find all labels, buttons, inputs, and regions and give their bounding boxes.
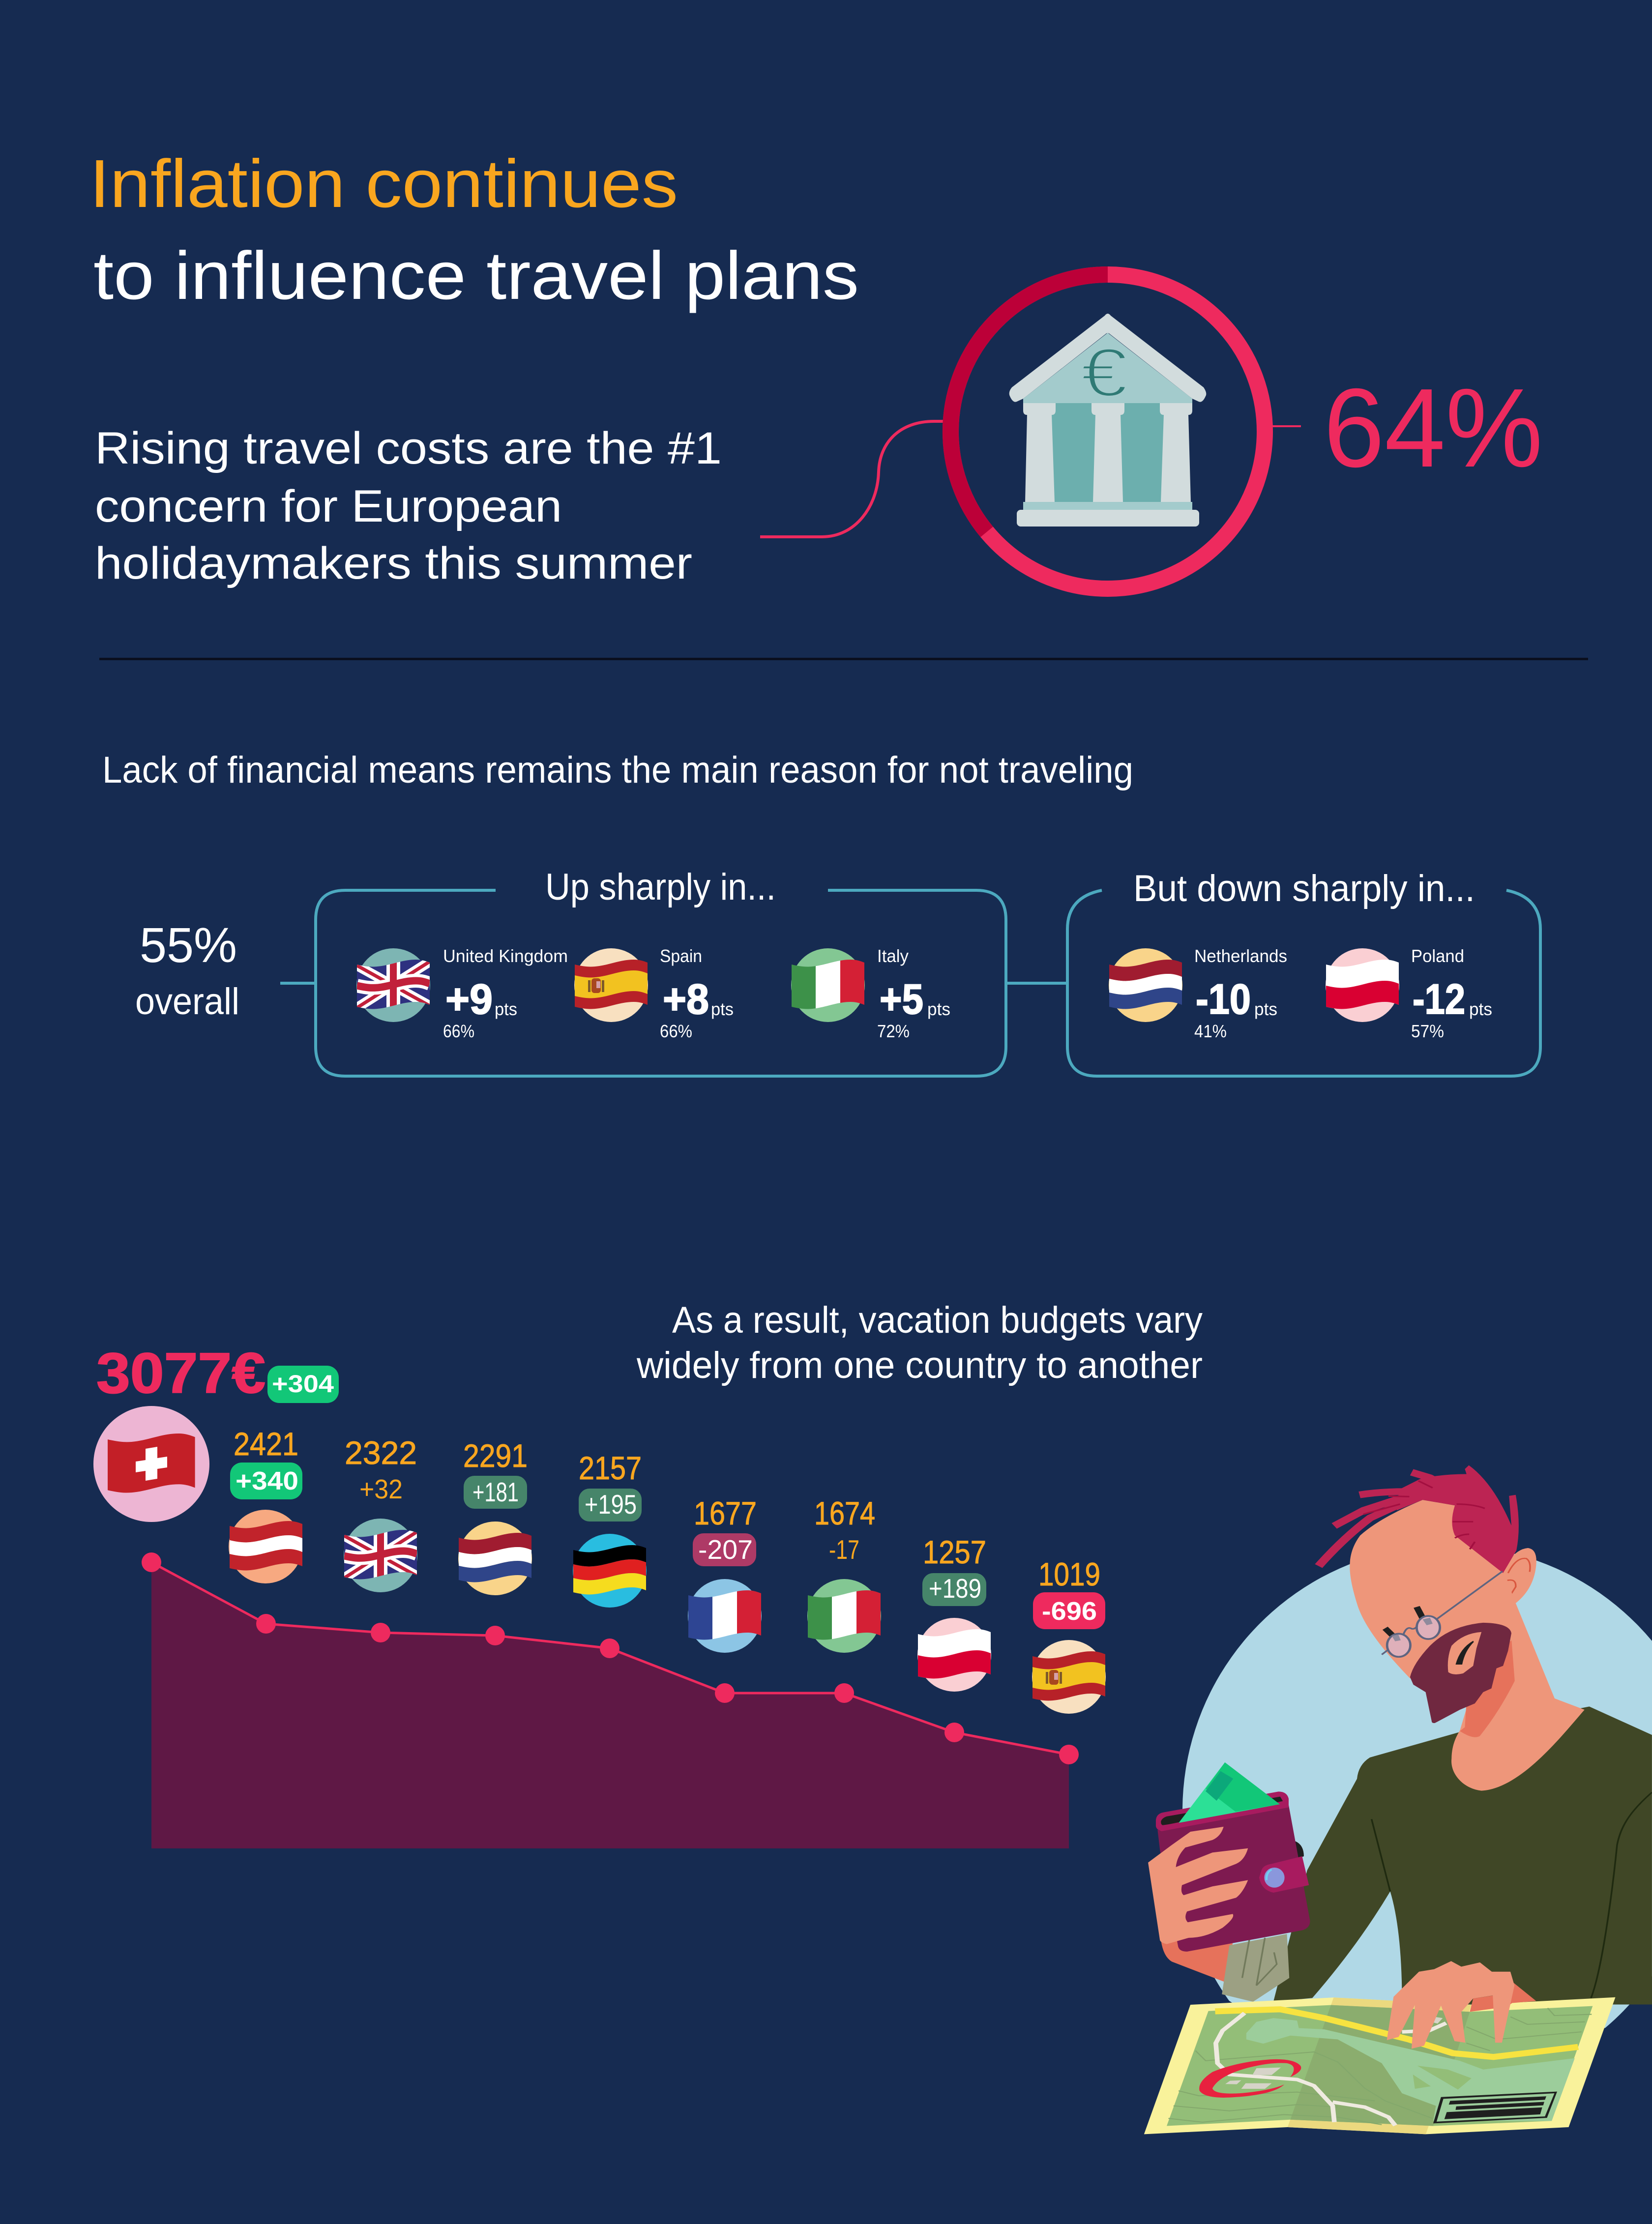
head [1350, 1500, 1516, 1678]
country: Germany: +195 [585, 1489, 637, 1520]
country: Austria [229, 1426, 302, 1583]
item: Italy: Italy [877, 946, 909, 966]
illustration: man with wallet and map [1144, 1465, 1652, 2134]
panel: up sharply [316, 866, 1006, 1076]
item: Netherlands: -10 [1196, 976, 1251, 1023]
item: Poland [1326, 946, 1492, 1041]
country: United Kingdom: 2322 [345, 1434, 417, 1471]
hand holding wallet [1148, 1827, 1248, 1944]
panel outline [1067, 890, 1540, 1076]
country: Spain: -696 [1042, 1597, 1097, 1626]
divider [99, 658, 1588, 660]
country: France: 1677 [694, 1495, 757, 1531]
country: Poland [917, 1534, 991, 1692]
item: United Kingdom: United Kingdom [443, 946, 568, 966]
ear [1502, 1548, 1536, 1606]
text block: rising travel costs: holidaymakers this summer [95, 538, 692, 588]
item: Netherlands: pts [1254, 999, 1277, 1019]
wallet front [1156, 1799, 1310, 1952]
overall stat: 55% [140, 918, 237, 973]
country: United Kingdom: +32 [359, 1474, 403, 1504]
area chart: budgets by country [142, 1552, 1079, 1848]
banknotes [1179, 1762, 1280, 1823]
item: United Kingdom: pts [495, 999, 517, 1019]
item: Poland: Poland [1411, 946, 1464, 966]
panel heading: Up sharply in... [545, 866, 776, 908]
item: Netherlands [1109, 946, 1287, 1041]
country: Germany: 2157 [579, 1450, 642, 1486]
item: Spain: Spain [660, 946, 702, 966]
country: France [688, 1495, 762, 1653]
title line 1: Inflation continues [89, 146, 678, 222]
overall stat: overall [135, 981, 239, 1023]
connector line: ring to value [1272, 425, 1301, 427]
heading: vacation budgets: widely from one country to another [636, 1345, 1203, 1386]
country: Spain [1032, 1556, 1106, 1714]
country: Netherlands [458, 1437, 532, 1595]
hand on map [1387, 1961, 1514, 2048]
hand on map shadow [1470, 1983, 1536, 2012]
item: Italy: +5 [880, 976, 923, 1023]
value: 64%: 64% [1324, 366, 1543, 491]
item: Poland: 57% [1411, 1021, 1444, 1041]
item: Spain [574, 946, 734, 1041]
item: United Kingdom [356, 946, 568, 1041]
country: Netherlands: +181 [472, 1477, 519, 1507]
country: Switzerland: +304 [272, 1370, 334, 1398]
country: Italy: 1674 [814, 1495, 875, 1531]
country: Poland: +189 [929, 1573, 981, 1604]
text block: rising travel costs: concern for European [95, 481, 562, 531]
donut chart: 64 percent [950, 274, 1265, 589]
item: Italy: pts [927, 999, 950, 1019]
item: United Kingdom: 66% [443, 1021, 474, 1041]
forearm [1161, 1940, 1233, 1983]
country: Germany [573, 1450, 647, 1608]
connector line: text to ring [760, 421, 944, 537]
map [1144, 1997, 1616, 2134]
text block: rising travel costs [95, 423, 722, 588]
title line 2: to influence travel plans [93, 238, 859, 314]
connector lines [280, 982, 1067, 985]
country: Poland: 1257 [923, 1534, 986, 1570]
neck [1451, 1603, 1585, 1791]
country: Austria: +340 [236, 1467, 298, 1495]
country: France: -207 [698, 1534, 753, 1565]
country: Italy: -17 [829, 1534, 859, 1565]
euro symbol: € [1081, 334, 1128, 411]
glasses and eyes [1382, 1571, 1503, 1657]
ear lines [1506, 1558, 1530, 1595]
hair [1319, 1465, 1519, 1573]
country: United Kingdom [344, 1434, 417, 1592]
item: Spain: pts [711, 999, 734, 1019]
icon: bank with euro [1009, 314, 1206, 527]
neck shadow [1460, 1638, 1515, 1737]
shirt [1273, 1706, 1652, 2005]
country: Italy [807, 1495, 881, 1653]
item: Italy [791, 946, 950, 1041]
panel outline [316, 890, 1006, 1076]
country: Spain: 1019 [1038, 1556, 1100, 1592]
item: Italy: 72% [877, 1021, 910, 1041]
country: Switzerland: 3077€ [96, 1341, 266, 1405]
heading: vacation budgets: As a result, vacation budgets vary [672, 1299, 1203, 1341]
text block: rising travel costs: Rising travel costs are the #1 [95, 423, 722, 473]
item: Poland: pts [1469, 999, 1492, 1019]
title [89, 146, 859, 314]
overall stat [135, 918, 239, 1023]
heading: vacation budgets [636, 1299, 1203, 1386]
item: Poland: -12 [1413, 976, 1465, 1023]
heading: lack of financial means: Lack of financial means remains the main reason for not traveling [102, 749, 1133, 791]
item: Netherlands: Netherlands [1194, 946, 1287, 966]
light blue circle backdrop [1180, 1545, 1652, 2065]
country: Netherlands: 2291 [463, 1437, 528, 1474]
country: Switzerland [93, 1341, 339, 1522]
country: Austria: 2421 [234, 1426, 298, 1462]
wallet back [1156, 1791, 1304, 1860]
panel heading: But down sharply in... [1133, 868, 1475, 909]
item: United Kingdom: +9 [445, 976, 493, 1023]
beard and mouth [1410, 1623, 1511, 1723]
item: Spain: 66% [660, 1021, 692, 1041]
sleeve cuff [1222, 1934, 1289, 2002]
wallet clasp [1259, 1856, 1309, 1893]
item: Netherlands: 41% [1194, 1021, 1227, 1041]
shirt fold lines [1372, 1792, 1652, 1998]
panel: down sharply [1067, 868, 1540, 1076]
item: Spain: +8 [663, 976, 709, 1023]
